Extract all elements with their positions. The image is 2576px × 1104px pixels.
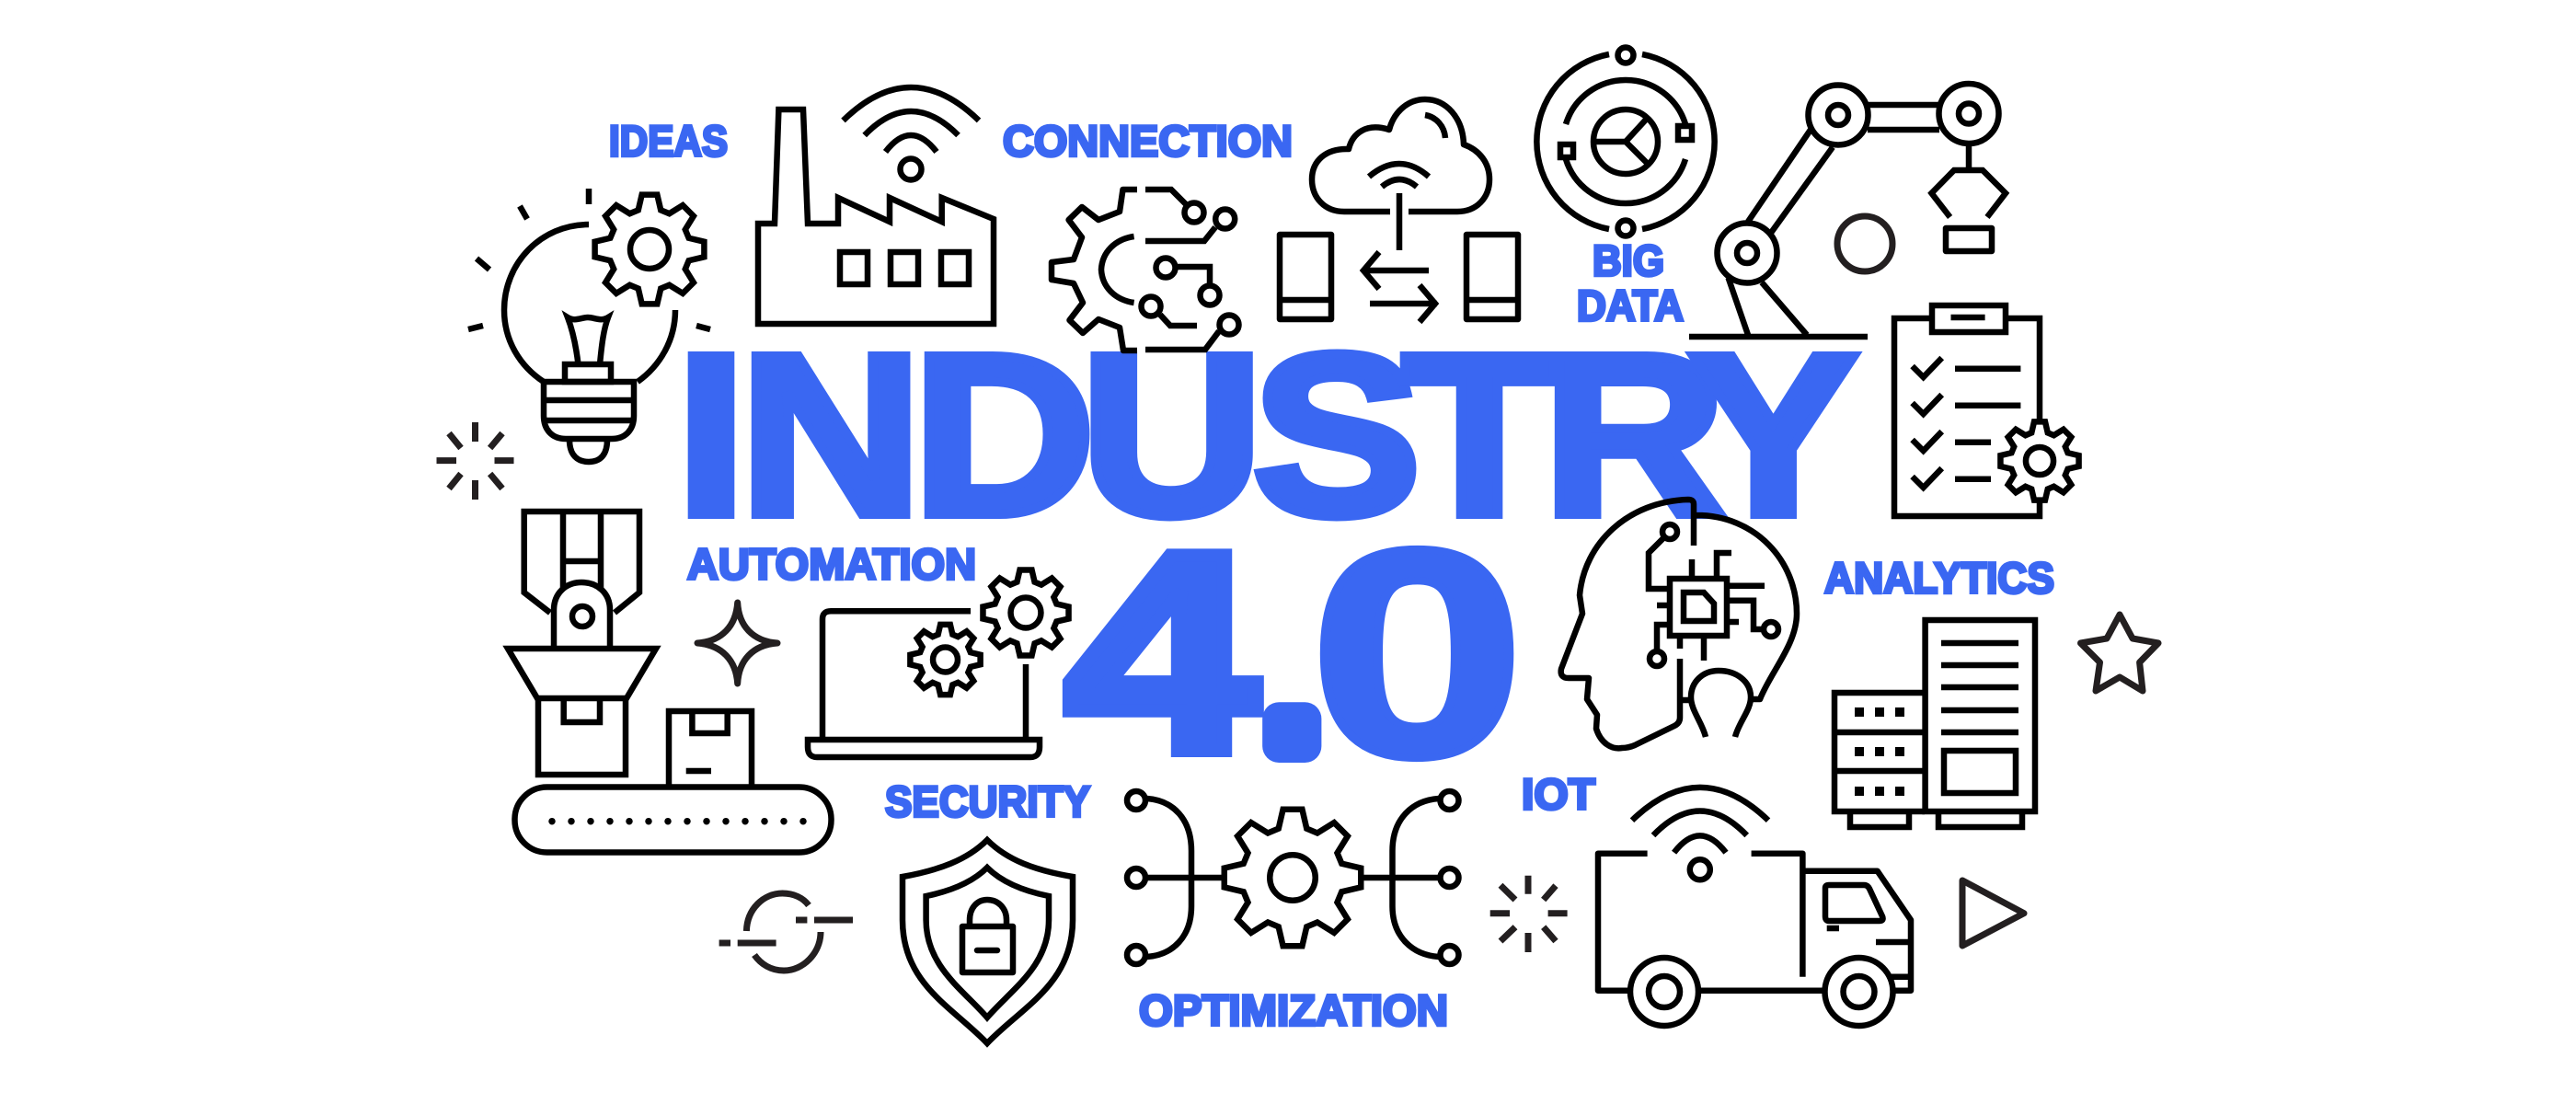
- arm joint: [572, 606, 592, 627]
- icon: decorative circle: [1837, 216, 1892, 271]
- gear outline: [1052, 190, 1137, 351]
- server lines: [1941, 643, 2018, 732]
- label: BIG: BIG: [1593, 236, 1664, 285]
- icon: packing robot and conveyor: [508, 512, 832, 852]
- icon: optimization gear network: [1127, 791, 1459, 964]
- outer shield: [903, 840, 1073, 1043]
- circuit traces: [1101, 190, 1219, 350]
- icon: automation laptop: [808, 569, 1069, 757]
- clipboard gear: [2000, 421, 2079, 500]
- exchange arrows: [1363, 252, 1437, 322]
- label: IOT: IOT: [1522, 771, 1595, 819]
- circuit nodes: [1141, 202, 1238, 335]
- rack: [1834, 693, 1925, 811]
- title: INDUSTRY: INDUSTRY: [676, 306, 1857, 563]
- label: OPTIMIZATION: OPTIMIZATION: [1139, 986, 1448, 1036]
- outer ring: [1536, 54, 1715, 229]
- ring squares: [1560, 126, 1692, 157]
- label: DATA: DATA: [1577, 282, 1684, 329]
- icon: cloud connection: [1280, 99, 1518, 322]
- idea gear: [595, 195, 704, 304]
- large gear: [983, 569, 1069, 656]
- robot arm: [554, 582, 610, 647]
- icon: security shield: [903, 840, 1073, 1043]
- central gear: [1225, 810, 1361, 946]
- light rays: [468, 189, 710, 329]
- connector nodes: [1127, 791, 1459, 964]
- right phone: [1466, 235, 1518, 319]
- hopper: [508, 649, 656, 698]
- label: IDEAS: IDEAS: [609, 118, 728, 166]
- box in hopper: [538, 698, 626, 775]
- feet: [1850, 811, 2022, 827]
- robot claw: [524, 512, 639, 613]
- pie chart: [1593, 109, 1658, 174]
- clip: [1932, 305, 2006, 332]
- label: SECURITY: SECURITY: [885, 778, 1090, 826]
- small gear: [910, 625, 981, 695]
- box on belt: [669, 711, 752, 787]
- factory windows: [840, 252, 969, 284]
- connector lines: [1146, 799, 1440, 957]
- cloud: [1312, 99, 1489, 212]
- wifi signal: [843, 87, 979, 152]
- digit 0: 0: [1309, 489, 1524, 819]
- icon: big data chart ring: [1536, 48, 1715, 236]
- filament: [565, 317, 611, 382]
- arm links: [1729, 105, 1939, 335]
- icon: play triangle: [1962, 880, 2024, 946]
- cab window: [1825, 885, 1883, 928]
- laptop base: [808, 740, 1040, 757]
- joints: [1717, 84, 1998, 283]
- label: CONNECTION: CONNECTION: [1003, 118, 1293, 166]
- inner ring: [1566, 80, 1685, 203]
- cloud wifi: [1369, 164, 1429, 250]
- padlock: [962, 900, 1013, 972]
- tall server: [1926, 620, 2035, 811]
- head outline: [1561, 500, 1797, 748]
- label: ANALYTICS: ANALYTICS: [1824, 554, 2054, 604]
- keyhole: [977, 948, 997, 953]
- title: 4.0: [1065, 489, 1524, 819]
- check lines: [1955, 369, 2020, 479]
- bulb glass: [504, 224, 675, 382]
- check marks: [1913, 358, 1942, 488]
- icon: checklist with gear: [1894, 305, 2079, 516]
- left phone: [1280, 235, 1331, 319]
- gripped box: [1946, 228, 1992, 251]
- bulb base: [544, 382, 634, 462]
- belt dots: [552, 818, 810, 824]
- cargo body: [1598, 854, 1824, 991]
- factory building: [758, 109, 994, 324]
- chip: [1670, 579, 1727, 636]
- icon: sparkle: [697, 603, 777, 684]
- inner shield: [926, 868, 1049, 1018]
- icon: analytics servers: [1834, 620, 2035, 827]
- icon: IoT truck: [1598, 788, 1911, 1026]
- icon: smart factory: [758, 87, 994, 324]
- wheels: [1630, 958, 1893, 1026]
- icon: light bulb with gear: [468, 189, 710, 462]
- decimal point: .: [1267, 581, 1317, 786]
- digit 4: 4: [1065, 494, 1260, 811]
- floor: [1689, 334, 1868, 339]
- wifi dot: [900, 158, 922, 180]
- wifi dot: [1690, 859, 1710, 880]
- chip traces: [1649, 538, 1765, 661]
- neck: [1680, 671, 1751, 737]
- rack dots: [1855, 707, 1904, 796]
- gripper: [1932, 146, 2006, 217]
- icon: link decoration: [719, 893, 853, 971]
- conveyor belt: [515, 788, 832, 852]
- icon: burst left: [436, 422, 513, 500]
- icon: star: [2081, 615, 2158, 691]
- clipboard: [1894, 318, 2040, 516]
- label: AUTOMATION: AUTOMATION: [687, 541, 976, 589]
- trace nodes: [1650, 524, 1778, 666]
- truck cab: [1805, 871, 1911, 991]
- server panel: [1944, 751, 2016, 793]
- icon: circuit gear: [1052, 190, 1238, 351]
- icon: AI head with chip: [1561, 500, 1797, 748]
- icon: burst right: [1490, 876, 1568, 952]
- icon: robot arm: [1689, 84, 2006, 337]
- ring nodes: [1617, 48, 1634, 236]
- truck wifi: [1632, 788, 1768, 853]
- laptop screen: [822, 611, 1026, 738]
